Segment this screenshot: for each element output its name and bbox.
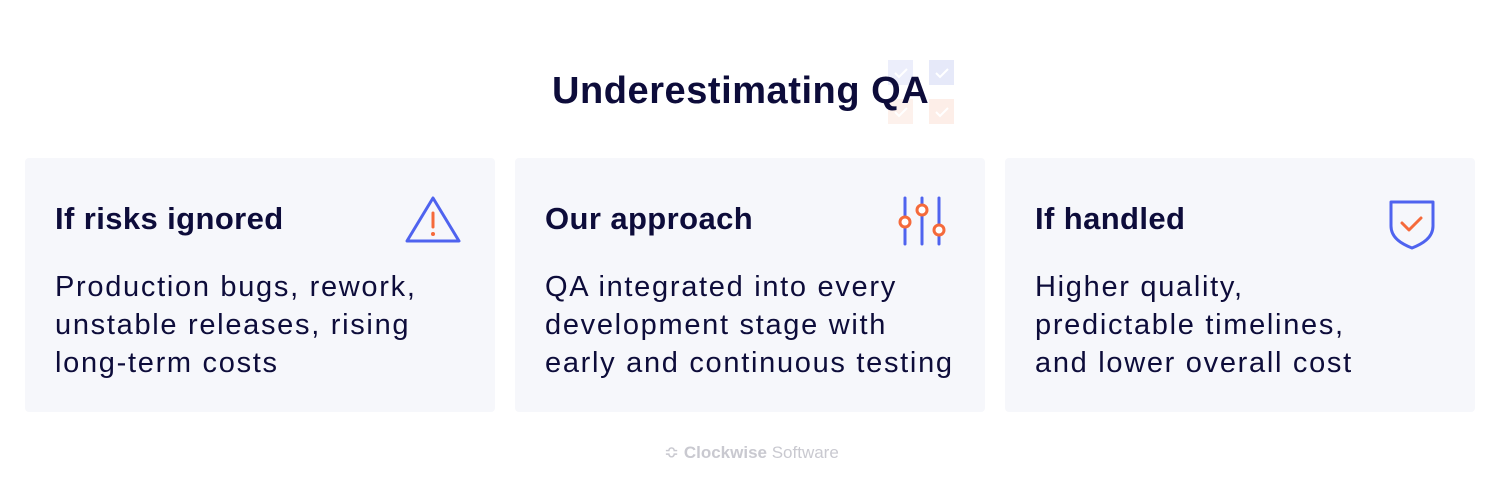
panel: if handled <box>1005 158 1475 412</box>
text: development stage with <box>545 309 887 341</box>
text: early and continuous testing <box>545 347 954 379</box>
icon: warning <box>406 196 461 242</box>
text: Higher quality, <box>1035 271 1244 303</box>
decoration: check squares <box>888 60 954 124</box>
title: Underestimating QA <box>552 70 929 112</box>
text <box>545 271 954 379</box>
heading: Our approach <box>545 201 753 236</box>
text <box>55 271 417 379</box>
text: and lower overall cost <box>1035 347 1353 379</box>
panel: our approach <box>515 158 985 412</box>
heading: If handled <box>1035 201 1185 236</box>
icon: sliders <box>898 196 946 246</box>
heading: If risks ignored <box>55 201 284 236</box>
text: long-term costs <box>55 347 279 379</box>
text: QA integrated into every <box>545 271 897 303</box>
icon: shield <box>1390 200 1434 250</box>
panel: if risks ignored <box>25 158 495 412</box>
text: unstable releases, rising <box>55 309 410 341</box>
text: Production bugs, rework, <box>55 271 417 303</box>
text: predictable timelines, <box>1035 309 1345 341</box>
text <box>1035 271 1353 379</box>
logo: ≎ Clockwise Software <box>664 442 839 462</box>
